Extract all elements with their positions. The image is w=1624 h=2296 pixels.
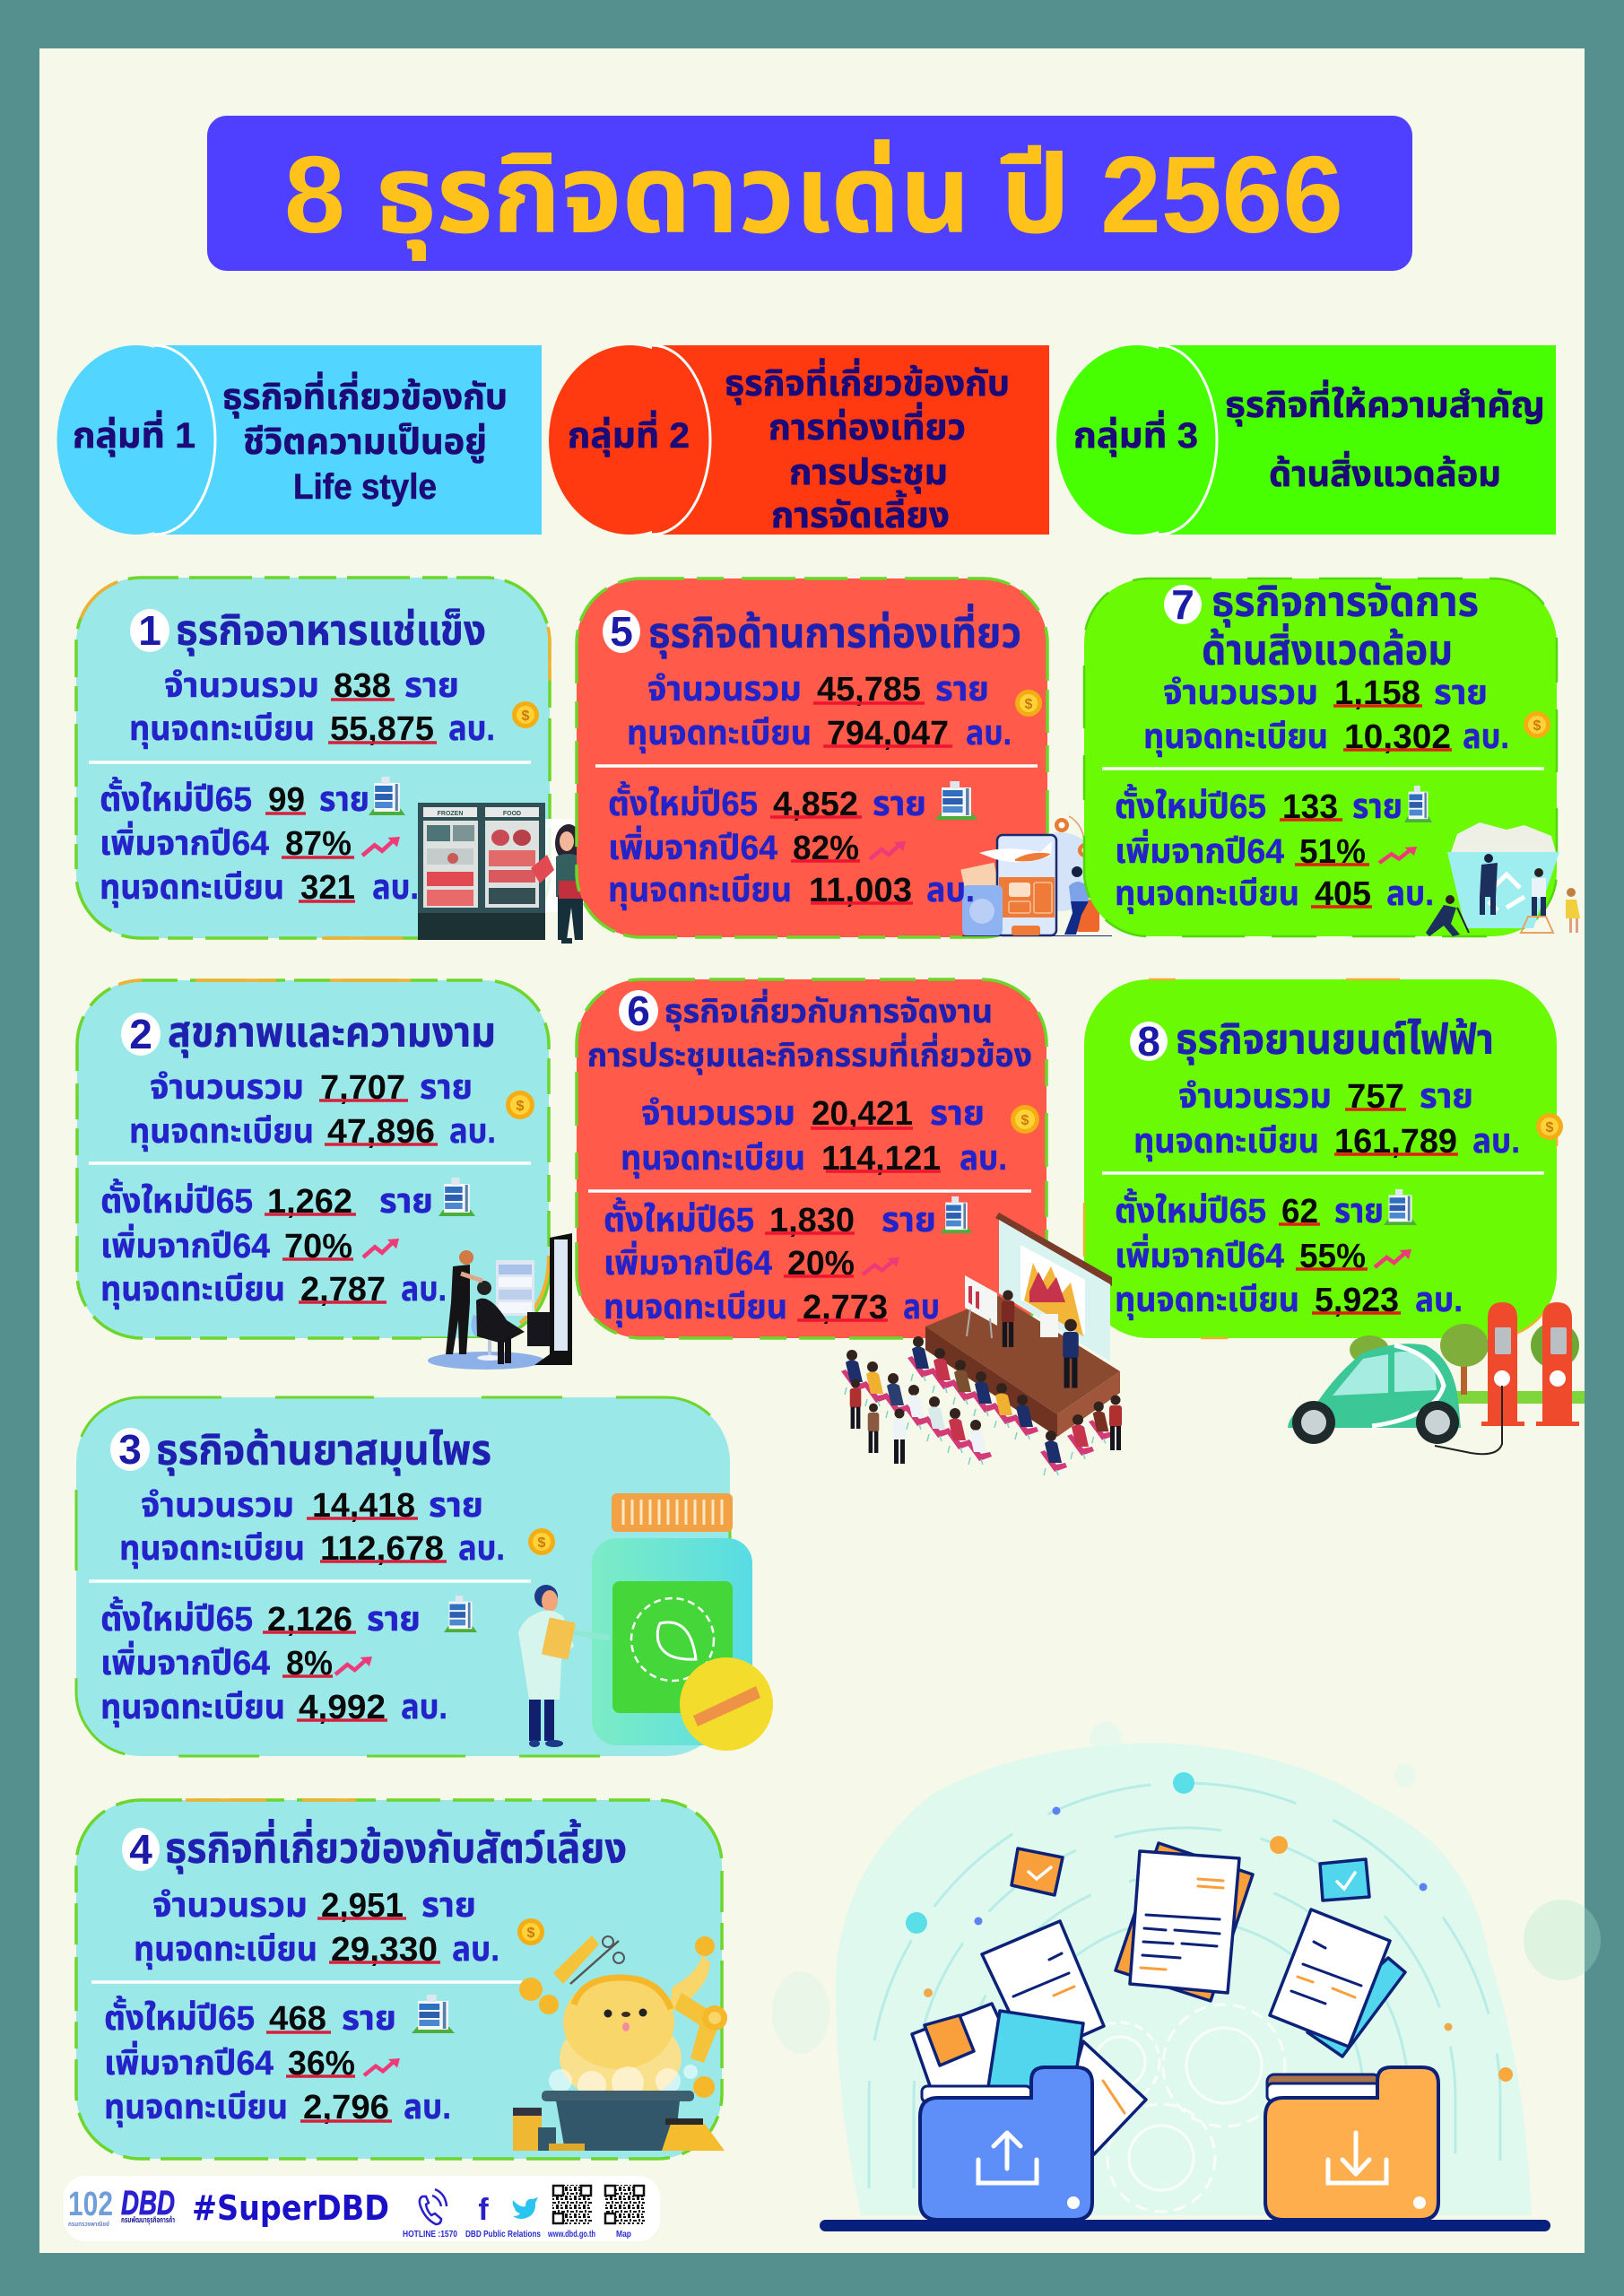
card 7 new capital: ลบ. — [1386, 875, 1434, 913]
illustration: pet grooming — [513, 1935, 727, 2151]
ministry 102 logo: 102 — [68, 2186, 113, 2223]
panel: card 7 environment — [1084, 578, 1557, 936]
card 7 heading: ธุรกิจการจัดการ — [1211, 578, 1479, 627]
card 8 new capital: ทุนจดทะเบียน — [1115, 1282, 1299, 1320]
card 5 new registrations: 4,852 — [773, 786, 858, 823]
card 1 trend arrow — [362, 837, 400, 856]
card 2 growth: 70% — [284, 1228, 352, 1265]
card 1 new capital — [100, 869, 419, 908]
card 2 new capital: ทุนจดทะเบียน — [100, 1271, 285, 1309]
card 1 building icon — [369, 777, 405, 815]
number badge 7: 7 — [1171, 581, 1194, 628]
footer captions: www.dbd.go.th — [547, 2229, 595, 2239]
card 7 heading: ด้านสิ่งแวดล้อม — [1202, 623, 1453, 674]
panel: card 6 events and meetings — [577, 979, 1046, 1338]
card 8 new registrations: 62 — [1281, 1193, 1318, 1231]
footer strip — [64, 2176, 660, 2241]
illustration: freezer and shopper: FROZEN — [438, 811, 463, 817]
card 4 growth: เพิ่มจากปี64 — [104, 2040, 274, 2083]
card 1 total capital — [129, 710, 495, 749]
card 3 total capital: ลบ. — [458, 1530, 505, 1568]
card 6 new capital: ลบ — [903, 1289, 940, 1326]
card 3 new registrations: ราย — [367, 1601, 421, 1639]
card 2 new capital — [100, 1271, 447, 1309]
number badge 6: 6 — [627, 987, 650, 1034]
illustration: recycling team — [1426, 822, 1580, 936]
card 3 new registrations: 2,126 — [267, 1601, 352, 1639]
card 8 building icon — [1384, 1189, 1417, 1225]
card 8 total capital — [1133, 1123, 1520, 1161]
illustration: travel phone and globe — [960, 816, 1112, 936]
panel: card 5 tourism — [577, 578, 1112, 937]
card 3 trend arrow — [335, 1657, 372, 1674]
card 6 coin icon — [1011, 1105, 1039, 1134]
card 5 coin icon: $ — [1025, 697, 1033, 712]
group 3 header: ธุรกิจที่ให้ความสำคัญ — [1225, 379, 1545, 427]
card 4 new registrations: ตั้งใหม่ปี65 — [104, 1995, 255, 2038]
card 8 total count: 757 — [1347, 1078, 1404, 1116]
panel: card 8 electric vehicles — [1084, 979, 1563, 1338]
card 1 new registrations — [100, 776, 369, 819]
number badge 3: 3 — [118, 1426, 142, 1473]
card 1 total count: 838 — [334, 667, 391, 705]
card 6 new registrations: 1,830 — [769, 1202, 855, 1239]
card 8 new capital: ลบ. — [1415, 1282, 1463, 1319]
card 1 coin icon — [512, 701, 539, 728]
card 2 total capital — [129, 1113, 496, 1152]
card 1 new capital: ทุนจดทะเบียน — [100, 869, 284, 908]
panel: card 2 health and beauty — [77, 980, 549, 1338]
card 5 new capital: ลบ. — [926, 872, 975, 909]
card 1 growth: เพิ่มจากปี64 — [100, 821, 269, 863]
card 5 new capital: 11,003 — [809, 872, 912, 909]
card 7 new capital — [1115, 875, 1434, 914]
group 1 header: Life style — [293, 467, 437, 507]
card 4 growth: 36% — [288, 2045, 355, 2083]
card 1 new registrations: ตั้งใหม่ปี65 — [100, 776, 252, 819]
card 3 total capital — [119, 1530, 505, 1569]
card 8 new registrations — [1115, 1187, 1384, 1231]
card 6 new capital — [604, 1289, 940, 1327]
card 7 coin icon — [1524, 711, 1550, 738]
card 4 building icon — [412, 1995, 455, 2033]
card 6 heading: ธุรกิจเกี่ยวกับการจัดงาน — [664, 988, 993, 1031]
card 6 heading — [587, 988, 1032, 1074]
card 1 new registrations: ราย — [319, 781, 369, 819]
card 7 new registrations — [1115, 783, 1403, 826]
card 6 total capital: ลบ. — [960, 1140, 1007, 1178]
card 7 growth: เพิ่มจากปี64 — [1115, 829, 1284, 871]
card 7 new registrations: ราย — [1352, 788, 1403, 826]
panel: card 1 frozen food — [76, 578, 550, 938]
card 6 growth: 20% — [787, 1245, 855, 1283]
group 1 header — [57, 345, 542, 535]
card 7 total count — [1163, 674, 1488, 712]
card 4 coin icon: $ — [527, 1926, 535, 1941]
card 7 total capital: 10,302 — [1344, 718, 1451, 756]
card 6 trend arrow — [863, 1257, 899, 1274]
card 6 total count: 20,421 — [812, 1095, 913, 1133]
number badge 5: 5 — [610, 608, 633, 655]
card 6 growth — [604, 1240, 855, 1283]
card 1 new capital: 321 — [300, 869, 355, 907]
card 2 total capital: 47,896 — [327, 1113, 435, 1151]
card 5 total capital: ทุนจดทะเบียน — [627, 715, 812, 753]
QR code hotline — [552, 2185, 592, 2224]
card 5 total count — [647, 671, 989, 709]
illustration: barber — [421, 1233, 572, 1370]
card 2 building icon — [439, 1178, 475, 1216]
card 2 heading: สุขภาพและความงาม — [168, 1008, 496, 1057]
hashtag: #SuperDBD — [192, 2188, 389, 2228]
group 3 header: กลุ่มที่ 3 — [1073, 410, 1198, 457]
card 7 new capital: 405 — [1315, 875, 1371, 913]
card 8 total count: จำนวนรวม — [1178, 1078, 1332, 1116]
title — [207, 116, 1412, 271]
card 2 new registrations: ตั้งใหม่ปี65 — [100, 1178, 253, 1221]
card 7 total capital: ทุนจดทะเบียน — [1143, 718, 1328, 757]
card 2 new registrations: ราย — [379, 1183, 433, 1221]
card 2 total count: 7,707 — [320, 1069, 405, 1107]
card 4 coin icon — [517, 1918, 544, 1945]
card 7 trend arrow — [1379, 847, 1417, 863]
card 6 total capital — [621, 1140, 1007, 1178]
card 4 new capital: ทุนจดทะเบียน — [104, 2089, 288, 2127]
card 5 trend arrow — [870, 841, 906, 859]
card 7 new registrations: 133 — [1282, 788, 1338, 826]
card 7 coin icon: $ — [1533, 718, 1541, 734]
card 7 growth: 51% — [1299, 833, 1366, 871]
card 1 heading: ธุรกิจอาหารแช่แข็ง — [176, 606, 486, 656]
illustration: freezer and shopper: FOOD — [503, 811, 521, 817]
card 7 total capital — [1143, 718, 1509, 757]
card 3 new capital — [100, 1689, 447, 1727]
card 1 new registrations: 99 — [268, 781, 305, 819]
footer captions — [403, 2229, 631, 2239]
card 5 total capital: 794,047 — [827, 715, 949, 752]
card 2 total count: ราย — [420, 1069, 473, 1107]
illustration: electric car and chargers — [1288, 1302, 1585, 1454]
card 7 building icon — [1404, 786, 1432, 822]
card 6 new registrations — [604, 1196, 936, 1239]
card 4 new registrations — [104, 1995, 396, 2038]
card 5 growth: เพิ่มจากปี64 — [608, 825, 777, 867]
card 3 total count — [141, 1487, 483, 1525]
footer captions: HOTLINE :1570 — [403, 2229, 457, 2239]
card 4 total count: ราย — [421, 1887, 476, 1925]
card 7 total count: ราย — [1434, 674, 1488, 712]
illustration: document folders — [772, 1722, 1601, 2231]
card 5 new registrations: ตั้งใหม่ปี65 — [608, 780, 758, 823]
card 2 new capital: 2,787 — [300, 1271, 386, 1309]
card 6 growth: เพิ่มจากปี64 — [604, 1240, 772, 1283]
group 2 header: การจัดเลี้ยง — [771, 490, 950, 535]
card 8 coin icon — [1536, 1113, 1563, 1140]
card 7 growth — [1115, 829, 1369, 871]
card 5 heading: ธุรกิจด้านการท่องเที่ยว — [648, 604, 1021, 658]
title: 8 ธุรกิจดาวเด่น ปี 2566 — [284, 134, 1343, 261]
card 1 total capital: ทุนจดทะเบียน — [129, 710, 315, 749]
card 4 total capital: ลบ. — [452, 1931, 499, 1969]
card 2 trend arrow — [363, 1239, 399, 1257]
ministry 102 logo: กรมทรวงพาณิชย์ — [68, 2221, 109, 2228]
card 6 new registrations: ตั้งใหม่ปี65 — [604, 1196, 754, 1239]
number badge 8 — [1130, 1018, 1168, 1065]
card 8 growth: 55% — [1299, 1238, 1366, 1275]
group 1 header: ชีวิตความเป็นอยู่ — [243, 422, 487, 464]
card 2 total capital: ลบ. — [449, 1113, 496, 1151]
card 6 total count — [641, 1095, 985, 1133]
card 7 total count: จำนวนรวม — [1163, 674, 1318, 712]
card 8 total capital: 161,789 — [1334, 1123, 1457, 1161]
card 2 coin icon: $ — [517, 1099, 525, 1114]
group 3 header: ด้านสิ่งแวดล้อม — [1269, 450, 1501, 494]
number badge 5 — [603, 608, 640, 655]
card 3 total capital: 112,678 — [320, 1530, 444, 1568]
card 3 new capital: ทุนจดทะเบียน — [100, 1689, 285, 1727]
card 2 new registrations: 1,262 — [267, 1183, 352, 1221]
card 5 growth — [608, 825, 860, 867]
card 3 coin icon: $ — [538, 1535, 546, 1551]
panel: card 3 herbal medicine — [76, 1397, 730, 1756]
card 8 new capital: 5,923 — [1315, 1282, 1399, 1319]
panel: card 4 pets — [76, 1800, 722, 2159]
card 4 total capital: ทุนจดทะเบียน — [134, 1931, 317, 1970]
card 8 growth: เพิ่มจากปี64 — [1115, 1233, 1284, 1275]
card 6 heading: การประชุมและกิจกรรมที่เกี่ยวข้อง — [587, 1032, 1032, 1074]
card 8 growth — [1115, 1233, 1368, 1275]
card 4 total capital — [134, 1931, 499, 1970]
card 3 new capital: 4,992 — [299, 1689, 386, 1726]
card 3 coin icon — [528, 1528, 555, 1555]
card 1 growth: 87% — [285, 825, 352, 863]
card 4 total capital: 29,330 — [331, 1931, 438, 1969]
card 8 new registrations: ราย — [1334, 1193, 1384, 1231]
card 1 total capital: 55,875 — [330, 710, 434, 748]
card 7 total capital: ลบ. — [1463, 718, 1509, 756]
card 8 heading: ธุรกิจยานยนต์ไฟฟ้า — [1176, 1015, 1494, 1065]
card 2 coin icon — [506, 1091, 534, 1119]
card 8 total capital: ลบ. — [1472, 1123, 1520, 1161]
card 3 total count: จำนวนรวม — [141, 1487, 294, 1525]
facebook icon: f — [478, 2193, 489, 2227]
card 3 new registrations: ตั้งใหม่ปี65 — [100, 1596, 253, 1639]
card 5 total capital: ลบ. — [966, 715, 1012, 752]
group 2 header: กลุ่มที่ 2 — [568, 410, 690, 457]
card 4 total count — [152, 1887, 476, 1925]
card 2 new capital: ลบ. — [401, 1271, 447, 1309]
number badge 4: 4 — [129, 1826, 152, 1873]
number badge 1: 1 — [138, 607, 161, 654]
card 6 total capital: 114,121 — [821, 1140, 941, 1178]
card 3 total count: 14,418 — [312, 1487, 415, 1525]
card 6 total count: จำนวนรวม — [641, 1095, 795, 1133]
card 3 total count: ราย — [429, 1487, 483, 1525]
card 5 total count: ราย — [935, 671, 989, 709]
number badge 3 — [110, 1426, 150, 1473]
card 4 new capital — [104, 2089, 451, 2127]
number badge 4 — [122, 1826, 160, 1873]
card 6 building icon — [941, 1196, 972, 1233]
card 1 new capital: ลบ. — [372, 869, 419, 907]
card 4 heading: ธุรกิจที่เกี่ยวข้องกับสัตว์เลี้ยง — [165, 1819, 627, 1874]
DBD logo: DBD — [121, 2185, 175, 2222]
card 6 new capital: ทุนจดทะเบียน — [604, 1289, 787, 1327]
illustration: presentation stage and audience — [841, 1213, 1122, 1475]
card 5 coin icon — [1015, 690, 1042, 717]
card 6 coin icon: $ — [1021, 1113, 1029, 1128]
card 3 growth: เพิ่มจากปี64 — [100, 1640, 270, 1683]
card 7 heading — [1202, 578, 1479, 674]
card 5 new registrations: ราย — [873, 786, 926, 823]
card 6 new registrations: ราย — [881, 1202, 936, 1239]
card 1 growth — [100, 821, 354, 863]
card 2 total capital: ทุนจดทะเบียน — [129, 1113, 314, 1152]
card 8 new capital — [1115, 1282, 1463, 1320]
card 6 total count: ราย — [930, 1095, 985, 1133]
card 4 new capital: ลบ. — [404, 2089, 451, 2126]
card 8 trend arrow — [1375, 1249, 1411, 1267]
footer captions: DBD Public Relations — [465, 2229, 541, 2239]
group 3 header — [1056, 345, 1556, 535]
card 3 new registrations — [100, 1596, 421, 1639]
card 3 total capital: ทุนจดทะเบียน — [119, 1530, 305, 1569]
card 2 total count: จำนวนรวม — [150, 1069, 304, 1107]
card 8 new registrations: ตั้งใหม่ปี65 — [1115, 1187, 1266, 1231]
card 6 new capital: 2,773 — [803, 1289, 888, 1326]
card 7 new registrations: ตั้งใหม่ปี65 — [1115, 783, 1266, 826]
number badge 2: 2 — [129, 1011, 152, 1057]
card 5 total count: จำนวนรวม — [647, 671, 802, 709]
card 1 total count: จำนวนรวม — [164, 667, 319, 705]
number badge 6 — [619, 987, 658, 1034]
card 7 new capital: ทุนจดทะเบียน — [1115, 875, 1299, 914]
card 1 coin icon: $ — [522, 709, 530, 724]
card 4 growth — [104, 2040, 355, 2083]
card 3 heading: ธุรกิจด้านยาสมุนไพร — [156, 1426, 491, 1475]
card 3 growth — [100, 1640, 333, 1683]
group 2 header: การท่องเที่ยว — [769, 402, 966, 448]
card 5 total capital — [627, 715, 1012, 753]
card 5 new capital: ทุนจดทะเบียน — [608, 872, 792, 910]
card 3 growth: 8% — [286, 1645, 333, 1683]
group 2 header: การประชุม — [789, 453, 948, 494]
card 1 total count: ราย — [404, 667, 459, 705]
card 2 growth: เพิ่มจากปี64 — [100, 1223, 270, 1265]
card 4 new capital: 2,796 — [303, 2089, 389, 2126]
card 5 new registrations — [608, 780, 926, 823]
card 4 trend arrow — [364, 2058, 400, 2075]
card 3 new capital: ลบ. — [401, 1689, 447, 1726]
DBD logo: กรมพัฒนาธุรกิจการค้า — [121, 2215, 175, 2224]
twitter icon — [513, 2197, 538, 2219]
card 2 new registrations — [100, 1178, 433, 1221]
card 3 building icon — [444, 1596, 477, 1632]
card 4 total count: จำนวนรวม — [152, 1887, 308, 1925]
number badge 1 — [130, 607, 169, 654]
group 1 header: กลุ่มที่ 1 — [73, 410, 195, 457]
number badge 2 — [121, 1011, 161, 1057]
card 8 coin icon: $ — [1546, 1120, 1554, 1135]
card 4 new registrations: 468 — [269, 2000, 326, 2038]
card 8 total count — [1178, 1078, 1473, 1116]
card 2 growth — [100, 1223, 353, 1265]
card 5 building icon — [935, 781, 977, 820]
group 1 header: ธุรกิจที่เกี่ยวข้องกับ — [222, 371, 508, 419]
card 5 new capital — [608, 872, 975, 910]
QR code map — [604, 2185, 645, 2224]
card 5 growth: 82% — [793, 830, 859, 867]
card 8 total capital: ทุนจดทะเบียน — [1133, 1123, 1319, 1161]
card 4 total count: 2,951 — [321, 1887, 404, 1925]
number badge 7 — [1164, 581, 1202, 628]
footer captions: Map — [616, 2229, 631, 2239]
card 5 total count: 45,785 — [817, 671, 921, 709]
card 8 total count: ราย — [1420, 1078, 1473, 1116]
phone icon — [420, 2189, 447, 2224]
illustration: herb bottle and pharmacist — [518, 1493, 773, 1751]
card 1 total count — [164, 667, 459, 705]
illustration: freezer and shopper — [418, 803, 591, 944]
group 2 header: ธุรกิจที่เกี่ยวข้องกับ — [725, 358, 1010, 405]
card 7 total count: 1,158 — [1334, 674, 1420, 712]
card 6 total capital: ทุนจดทะเบียน — [621, 1140, 805, 1178]
number badge 8: 8 — [1137, 1018, 1160, 1065]
card 2 total count — [150, 1069, 473, 1107]
card 4 new registrations: ราย — [342, 2000, 396, 2038]
card 1 total capital: ลบ. — [448, 710, 495, 748]
group 2 header — [549, 345, 1049, 535]
